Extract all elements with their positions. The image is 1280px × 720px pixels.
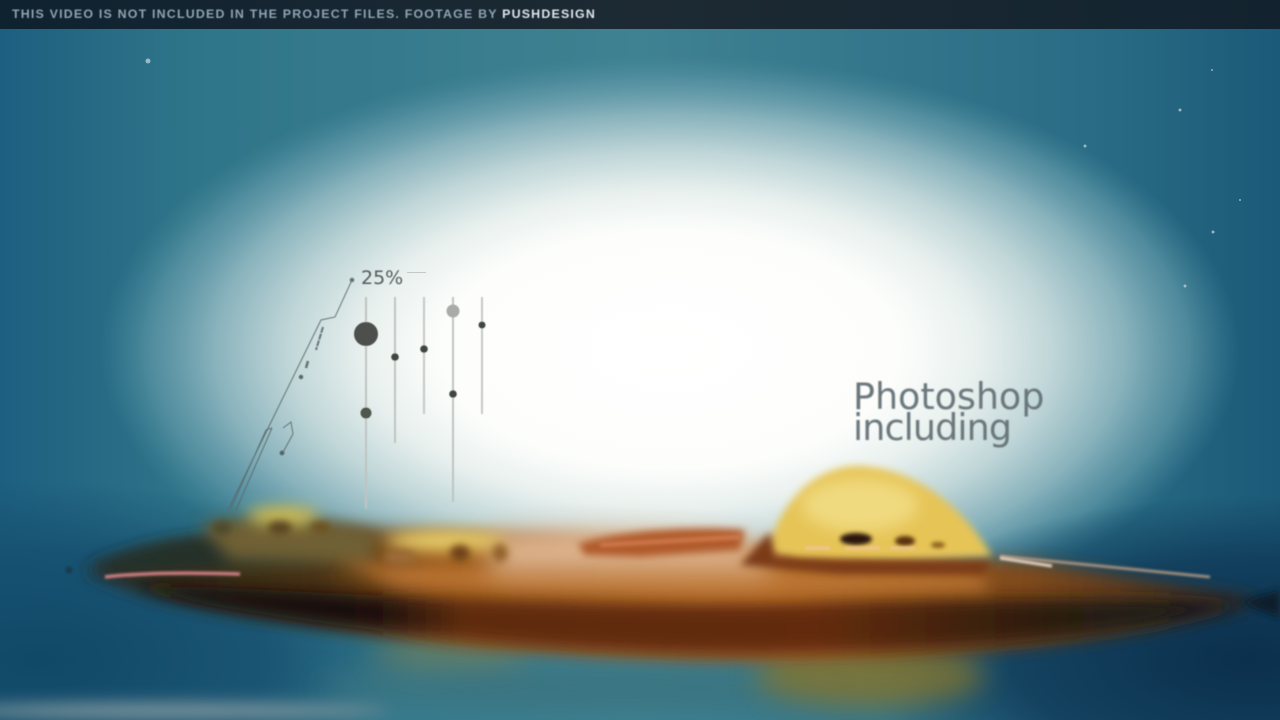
notice text: THIS VIDEO IS NOT INCLUDED IN THE PROJECT FILES. FOOTAGE BY PUSHDESIGN xyxy=(12,7,596,21)
caption text xyxy=(853,375,1044,449)
percentage label: 25% xyxy=(361,267,403,289)
particles xyxy=(146,58,1241,288)
debris reflection xyxy=(370,638,985,707)
slider 2 xyxy=(391,297,399,443)
chart: callout leader line xyxy=(228,278,354,510)
caption text: Photoshop xyxy=(853,375,1044,418)
caption text: including xyxy=(853,406,1011,449)
debris details xyxy=(66,521,1280,618)
callout tick xyxy=(407,272,426,273)
footage notice bar xyxy=(0,0,1280,29)
yellow mounds xyxy=(247,466,992,560)
debris body xyxy=(85,517,1262,660)
slider 4 xyxy=(446,297,460,502)
chart: vertical range sliders xyxy=(354,297,486,509)
slider 5 xyxy=(478,297,486,414)
slider 1 xyxy=(354,297,378,509)
slider 3 xyxy=(420,297,428,414)
